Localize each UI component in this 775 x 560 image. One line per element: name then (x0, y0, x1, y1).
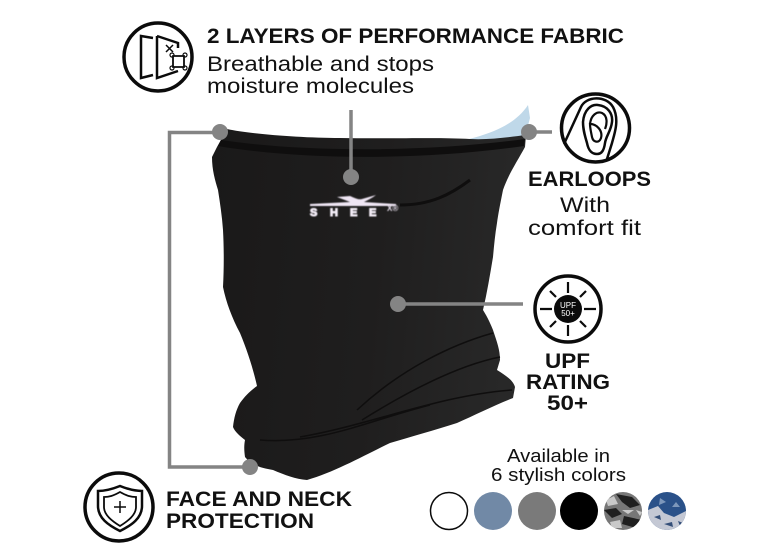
neck gaiter photo (212, 105, 530, 480)
heading: face and neck protection: PROTECTION (166, 510, 314, 533)
text: fabric description: Breathable and stops (207, 53, 434, 76)
swatch: black and white camo (604, 492, 642, 530)
icon: ear (562, 94, 630, 162)
heading: face and neck protection (166, 488, 352, 533)
text: colors available: 6 stylish colors (491, 465, 626, 485)
brand logo on fabric: X® (387, 204, 398, 213)
text: earloops description: comfort fit (528, 217, 641, 240)
heading: UPF rating: 50+ (547, 392, 588, 415)
callout: UPF connector (390, 296, 523, 312)
callout: fabric connector (343, 110, 359, 185)
heading: UPF rating (526, 350, 610, 415)
callout: bracket connector for face and neck (170, 124, 258, 475)
heading: face and neck protection: FACE AND NECK (166, 488, 352, 511)
text: fabric description (207, 53, 434, 98)
icon: shield (85, 473, 153, 541)
icon: UPF sun (535, 276, 601, 342)
swatch: black (560, 492, 598, 530)
heading: fabric: 2 LAYERS OF PERFORMANCE FABRIC (207, 25, 624, 48)
swatch: blue (474, 492, 512, 530)
heading: UPF rating: RATING (526, 371, 610, 394)
brand logo on fabric: SHEE (310, 207, 376, 219)
text: colors available (491, 446, 626, 485)
color swatches (430, 492, 686, 530)
icon: two fabric layers with molecules (124, 23, 192, 91)
icon: UPF sun: UPF (560, 301, 576, 310)
text: colors available: Available in (507, 446, 610, 466)
brand logo on fabric (310, 195, 398, 219)
heading: UPF rating: UPF (545, 350, 590, 373)
callout: earloop connector (521, 124, 552, 140)
text: fabric description: moisture molecules (207, 75, 414, 98)
heading: earloops: EARLOOPS (528, 168, 651, 191)
swatch: gray (518, 492, 556, 530)
swatch: blue and white camo (648, 492, 686, 530)
text: earloops description (528, 194, 641, 240)
text: earloops description: With (560, 194, 610, 217)
icon: UPF sun: 50+ (561, 309, 575, 318)
swatch: white (430, 492, 468, 530)
